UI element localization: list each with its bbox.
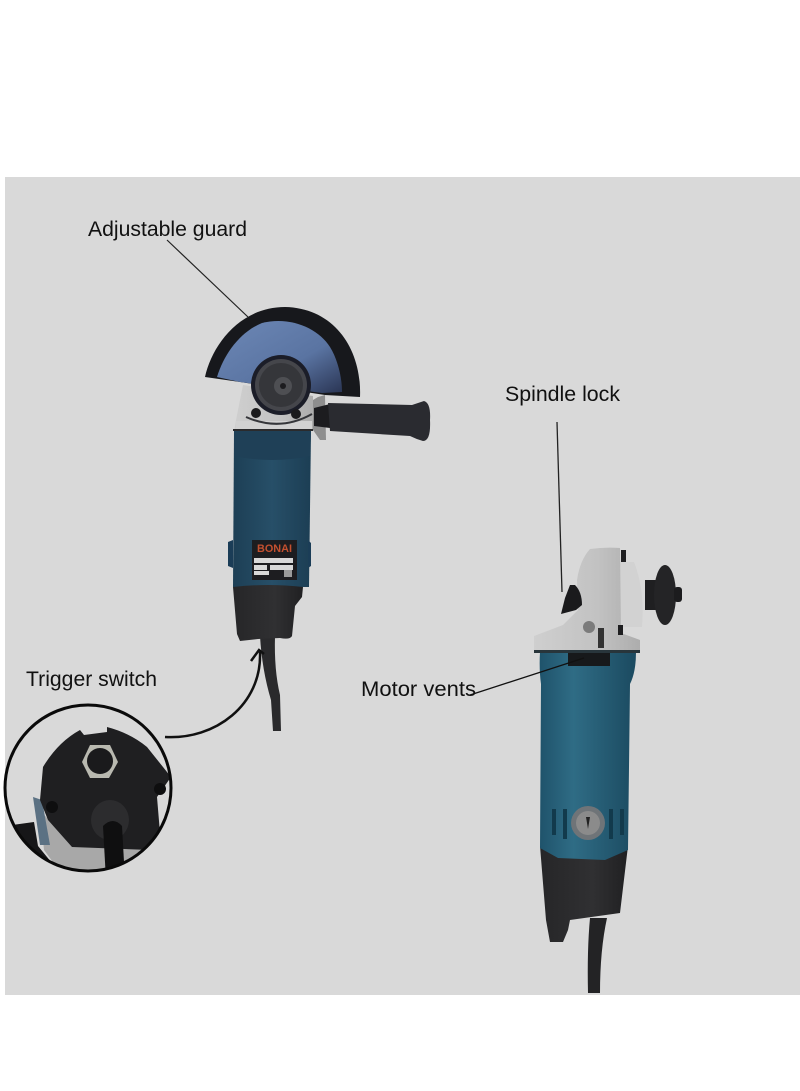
gear head lower band [236, 421, 312, 429]
cable: front view [260, 636, 281, 731]
inset: nut [82, 745, 118, 778]
infographic: angle grinder features [4, 177, 800, 995]
callout: trigger switch: Trigger switch [26, 668, 157, 691]
inset: circle outline [5, 705, 171, 871]
grinder: front view [205, 307, 430, 731]
flange ring [620, 562, 643, 627]
guard hub shadow [251, 355, 311, 415]
body: front view [233, 431, 311, 587]
brand label [252, 540, 297, 580]
screw cap [571, 806, 605, 840]
side handle [313, 395, 430, 441]
body: side view [540, 652, 636, 860]
callout: spindle lock: Spindle lock [505, 383, 621, 406]
callout: spindle lock [505, 383, 621, 592]
spindle disc and nut [645, 565, 682, 625]
motor vent opening [568, 653, 610, 666]
inset: blue housing [33, 797, 50, 845]
callout: adjustable guard: Adjustable guard [88, 218, 247, 241]
body shoulder shade [234, 431, 311, 460]
gear head retaining arc [246, 414, 312, 424]
brand label: BONAI [257, 543, 292, 555]
inset: black rear cap [40, 727, 171, 850]
side grips [228, 540, 311, 568]
cable: side view [588, 918, 607, 993]
body collar [233, 429, 313, 431]
arrow: trigger switch to grinder [165, 650, 264, 737]
rear cap: side view [540, 846, 628, 942]
spindle lock button [561, 585, 582, 614]
callout: motor vents [361, 658, 584, 701]
inset: trigger switch detail [5, 705, 171, 880]
gear head: side view [534, 548, 640, 651]
collar [534, 650, 640, 653]
bolts [251, 408, 261, 418]
guard: blue inner face [217, 321, 342, 393]
head bolts [618, 550, 626, 635]
inset: black side handle [15, 822, 50, 860]
gear head: front view [234, 385, 313, 431]
background panel [5, 177, 800, 995]
guard: outer rim [205, 307, 360, 397]
callout: adjustable guard [88, 218, 248, 317]
grinder: side view [534, 548, 682, 993]
callout: motor vents: Motor vents [361, 678, 476, 701]
inset: cable grommet [91, 800, 129, 840]
gear head fixings [583, 621, 595, 633]
vents [552, 809, 624, 839]
flange [255, 359, 307, 411]
black rear cap: front view [233, 585, 303, 641]
inset: silver band [44, 815, 142, 870]
inset: screws [154, 783, 166, 795]
